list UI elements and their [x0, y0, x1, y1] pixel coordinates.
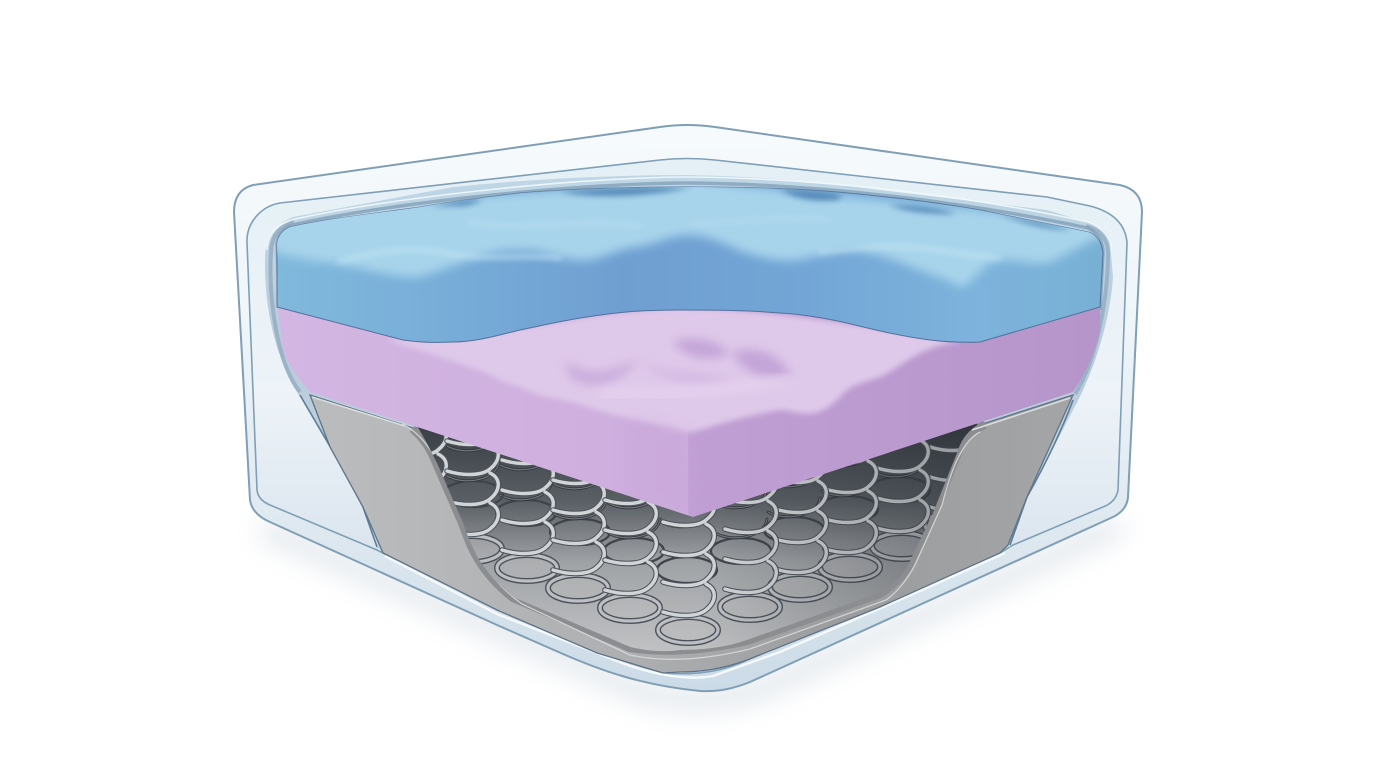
- gray support panel: [310, 395, 1073, 673]
- purple foam top surface: [387, 308, 962, 433]
- rear springs: [446, 444, 931, 583]
- cover rim around cavity: [265, 175, 1113, 549]
- ground shadow: [262, 525, 1120, 700]
- outer cover shell: [234, 125, 1142, 691]
- inner cover panel: [247, 158, 1127, 674]
- bottom rim highlight: [385, 553, 1005, 678]
- blue foam layer: [270, 180, 1110, 342]
- illustration: mattress cutaway: [233, 124, 1143, 717]
- blue foam dark creases: [430, 187, 1070, 230]
- purple foam dents: [565, 339, 792, 385]
- apex shading: [630, 420, 693, 520]
- panel inner edge band: [413, 424, 985, 650]
- purple foam layer: [277, 305, 1100, 520]
- coil spring bed: [418, 422, 982, 652]
- blue foam highlights: [338, 244, 1002, 266]
- front spring row, left and right edges back to front: [390, 395, 985, 643]
- blue foam top surface: [270, 180, 1110, 287]
